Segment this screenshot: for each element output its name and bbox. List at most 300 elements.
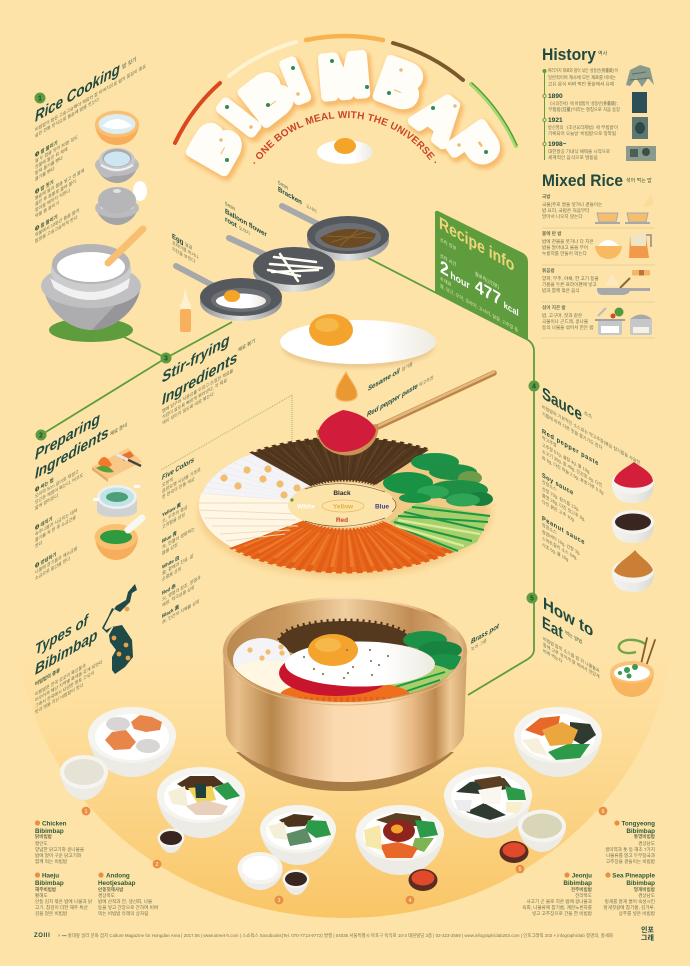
history text: 여러가지 재료와 밥이 섞인 '골동반(骨董飯)'이 <box>548 67 618 74</box>
recipe: red pepper paste: 고추장 57g, 설탕 4g, 물 10g, <box>542 441 590 476</box>
title: BIBIMBAP: I <box>209 92 268 143</box>
five colors heading: Five Colors <box>162 456 194 482</box>
connecting green flow line <box>41 258 534 695</box>
caption: haeju bibimbap: 해주비빔밥 <box>35 886 57 893</box>
mixed rice text: 곡물이나 곤드레, 콩나물 <box>542 318 588 325</box>
label: red pepper paste: Red pepper paste <box>367 383 418 419</box>
preparing text: 물기를 꼭 짠 후 소금간을 <box>35 513 76 544</box>
types text: 비빔밥의 종류 <box>35 666 60 688</box>
recipe: peanut sauce: 땅콩소스 <box>542 521 557 535</box>
rice steps text: 물기를 뺀다 <box>35 164 55 183</box>
caption: andong heotjesabap: Andong <box>106 872 130 880</box>
caption: tongyeong bibimbap: 통영비빔밥 <box>634 833 656 840</box>
colour label: yellow: Yellow <box>333 504 354 510</box>
pot interior <box>223 597 467 705</box>
pot contents <box>233 618 462 702</box>
preparing text: 소금으로 밑간을 한다 <box>35 554 71 582</box>
caption: jeonju bibimbap <box>522 872 593 917</box>
calories: 477 <box>475 275 501 310</box>
footer logo: korean mark: 인포 <box>641 925 654 934</box>
panel: stir-frying pans <box>172 180 389 332</box>
sprout heads <box>220 465 301 499</box>
pan: egg <box>176 266 282 321</box>
footer logo: korean mark: 그래 <box>641 933 654 942</box>
cooking time: 조리 시간 <box>440 252 457 269</box>
history text: 1921 <box>548 117 563 124</box>
five colors text: 봄을 상징 <box>162 541 178 557</box>
caption: haeju bibimbap: 고기, 참김이 더한 해주 특산 <box>35 904 89 911</box>
icons: gukbap bowls <box>595 195 654 224</box>
side bowl: soup 2 <box>518 810 566 852</box>
title: BIBIMBAP: P <box>440 117 513 184</box>
colour label: red: Red <box>336 517 348 524</box>
panel: stir-frying ingredients text <box>160 331 292 626</box>
fried egg large <box>280 314 436 368</box>
bowl 6: tongyeong bibimbap <box>514 707 602 777</box>
label: red pepper paste <box>367 373 434 419</box>
mixed rice text <box>542 193 602 331</box>
caption: tongyeong bibimbap: 생미역과 톳 등 해초 7가지 <box>605 846 655 853</box>
rice steps text: 쌀 두 컵을 씻어 30분 정도 <box>35 133 78 165</box>
subtitle on arc: · ONE BOWL MEAL WITH THE UNIVERSE · <box>253 111 436 164</box>
five colors text: 한 한국의 전통 색상 <box>162 475 195 501</box>
colour label: blue: Blue <box>375 504 389 510</box>
title: BIBIMBAP: B <box>180 117 255 184</box>
five colors text <box>162 456 201 626</box>
pot base <box>236 752 454 791</box>
bowl number badges: 5 <box>519 867 522 873</box>
panel: stir-frying ingredients text: 재료 볶기 <box>238 337 255 354</box>
five colors text: 순결을 상징 <box>162 565 181 583</box>
five colors text: 金, 결백과 진실, 삶 <box>162 552 194 577</box>
history text: 고유 음식 비벼 먹던 풍습에서 유래 <box>548 80 614 88</box>
label: bracken <box>278 180 317 215</box>
caption: andong heotjesabap <box>98 872 158 917</box>
bowl number badges <box>82 807 607 904</box>
caption: haeju bibimbap: 황해도 <box>35 892 48 899</box>
panel: mixed rice <box>542 171 655 338</box>
icon: stone pot with lid and steam <box>95 181 147 225</box>
central five-colour ingredient ring <box>199 449 493 577</box>
sauce intro: 비빔밥의 기본적인 소스로는 약고추장(볶음 찹기름을 사용한 <box>542 403 641 467</box>
recipe: red pepper paste: Red pepper paste <box>542 428 599 468</box>
caption: andong heotjesabap: Heotjesabap <box>98 880 136 887</box>
caption: tongyeong bibimbap: Tongyeong <box>622 820 655 828</box>
map of korea <box>102 584 137 674</box>
bean sprout segment <box>246 470 281 497</box>
step number 2 <box>36 430 46 440</box>
heading: stir-frying ingredients: Stir-frying <box>162 331 230 387</box>
five colors text: White 白 <box>162 554 179 571</box>
colour label: yellow <box>322 500 364 512</box>
brass pot <box>220 597 467 791</box>
mixed rice text: 기름을 두른 프라이팬에 넣고 <box>542 281 597 288</box>
label: bracken: Bracken <box>278 186 302 207</box>
preparing text <box>35 459 83 582</box>
caption: andong heotjesabap: 경상북도 <box>98 892 115 899</box>
caption: haeju bibimbap: Bibimbap <box>35 880 64 887</box>
recipe: peanut sauce: 땅콩버터 10g, 간장 3g, <box>542 528 580 557</box>
history text: 세계적인 음식으로 발돋움 <box>548 154 598 161</box>
spoon with red pepper paste <box>316 372 494 455</box>
preparing text: 한다 <box>35 538 43 550</box>
bracken in pot <box>278 618 410 654</box>
leader dot <box>290 498 294 502</box>
history text: 1890 <box>548 93 563 100</box>
label: balloon flower root: 도라지 <box>239 224 250 237</box>
preparing text: ❸ 양념하기 <box>35 550 57 570</box>
title: BIBIMBAP: B <box>372 50 432 123</box>
cucumber in pot <box>388 665 452 698</box>
title letter speckles <box>219 59 488 162</box>
title: BIBIMBAP: I <box>276 48 314 113</box>
recipe: soy sauce: 간장소스 <box>542 478 557 492</box>
recipe: peanut sauce: 식초 5g, 물 15g <box>542 541 569 563</box>
rice steps text: 약불 뜸 들이기 <box>35 199 59 220</box>
panel: how to eat <box>526 592 655 697</box>
caption: jeonju bibimbap: Jeonju <box>572 872 592 880</box>
types text: 그래서 전국에서 다양한 향토 고유의 <box>35 669 94 710</box>
history text: 일반적이며 제사에 모든 재료를 비비는 <box>548 74 616 81</box>
label: balloon flower root: Balloon flower <box>225 208 267 239</box>
icon: stone pot with water <box>95 148 139 183</box>
caption: jeonju bibimbap: 사고기 곤 물로 지은 밥에 콩나물과 <box>526 898 593 905</box>
label: balloon flower root: 5min <box>225 201 235 213</box>
pot body <box>223 651 467 782</box>
footer <box>34 925 654 942</box>
icon: pot with greens <box>93 485 140 517</box>
recipe: red pepper paste: 약고추장 <box>542 434 557 450</box>
five colors text: Black 黑 <box>162 604 179 620</box>
rice steps text: ❷ 밥 짓기 <box>35 178 54 196</box>
pot front rim fade <box>223 651 467 705</box>
title: BIBIMBAP: A <box>404 80 475 155</box>
title: BIBIMBAP: B <box>234 63 305 138</box>
caption: sea pineapple bibimbap: 멍게를 잘게 썰어 숙성시킨 <box>605 898 655 905</box>
caption: tongyeong bibimbap: 나물류를 얹고 두부탕국과 <box>606 852 656 859</box>
heading: stir-frying ingredients <box>162 331 237 409</box>
title: BIBIMBAP: B <box>178 114 253 181</box>
recipe: red pepper paste <box>542 428 604 497</box>
rice steps text: 잦아들 때까지 익힌다 <box>35 186 71 214</box>
main ingredients: 주재료 <box>440 275 452 289</box>
title: BIBIMBAP: I <box>279 51 317 116</box>
ring shadow <box>199 449 491 577</box>
recipe: soy sauce: Soy sauce <box>542 472 573 497</box>
bowl 2: andong heotjesabap <box>157 767 245 838</box>
history text: 1998~ <box>548 141 567 148</box>
title: BIBIMBAP: M <box>318 42 370 109</box>
caption: haeju bibimbap <box>35 872 93 917</box>
calories <box>475 270 519 320</box>
caption: andong heotjesabap: 안동헛제사밥 <box>98 886 124 893</box>
label: sesame oil <box>368 360 413 393</box>
step number 1 <box>34 92 46 104</box>
rice steps text: 약불에서 10분간 뜸을 들여 <box>35 206 79 239</box>
heading: mixed rice: Mixed Rice <box>542 171 623 190</box>
recipe: red pepper paste: 파 6g, 다진 마늘 2.5g, 후춧가루 0.3g <box>542 454 604 497</box>
title: BIBIMBAP: B <box>232 60 303 135</box>
icon: mixing arrow <box>619 640 645 653</box>
five colors text: 水, 인간의 지혜를 상징 <box>162 597 200 626</box>
caption: andong heotjesabap: 밥에 산적과 전, 생선회, 나물 <box>98 898 152 905</box>
history text: 대한항공 기내식 채택을 시작으로 <box>548 148 610 155</box>
label: sesame oil: 참기름 <box>402 360 413 374</box>
side dish: red sauce <box>408 869 438 891</box>
step number 2: 2 <box>39 432 43 440</box>
recipe: peanut sauce <box>542 515 585 573</box>
history text: '부뷤밥(汨董)'이라는 명칭으로 처음 등장 <box>548 106 621 113</box>
colour label: white: White <box>297 504 315 510</box>
icon: oil bottle <box>180 288 191 332</box>
intro text: 살린 전통 방식으로 돌솥에 밥을 짓는다 <box>35 95 100 140</box>
icon: small egg under title <box>317 138 373 164</box>
step number 4: 4 <box>532 384 536 390</box>
panel: recipe info: 조리 정보 <box>440 236 457 253</box>
panel: recipe info <box>435 211 528 340</box>
white root sticks <box>199 503 298 541</box>
label: egg: Egg <box>172 233 183 247</box>
carrot segment <box>267 534 418 551</box>
heading korean: 밥 짓기 <box>122 55 136 71</box>
bowl 4: jeonju bibimbap <box>355 805 444 875</box>
footer text: × ▪▪▪ 홍대앞 일러 문화 잡지 Culture Magazine for Hongdae Area | 2017.06 | www.street-h.com | 스쇼픽스 Sosobooks(Tel. 070-7713-9772) 발행 | 04035 서울특별시 마포구 독막로 10-3 태원빌딩 3층 | 02-323-2569 | www.infographiclab203.com | 인포그래픽 203 × infographiclab 정명의, 홍세화 <box>58 932 613 939</box>
step number 3 <box>160 352 172 364</box>
label: brass pot: Brass pot <box>471 623 499 646</box>
heading: how to eat: Eat <box>542 613 563 643</box>
caption: chicken bibimbap: 함께 먹는 비빔밥 <box>35 858 68 865</box>
side dish: red sauce 2 <box>500 841 528 863</box>
caption: haeju bibimbap: 안동 김치 볶은 밥에 나물과 닭 <box>35 898 93 905</box>
label: balloon flower root: root <box>225 216 237 230</box>
caption: chicken bibimbap: Bibimbap <box>35 828 64 835</box>
icons: rice bowl and jug <box>595 234 651 259</box>
caption: jeonju bibimbap: 전라북도 <box>575 892 592 899</box>
mixed rice text: 밥에 찬물을 붓거나 다 지은 <box>542 238 594 245</box>
caption: andong heotjesabap: 먹는 비빔밥 유래의 상차림 <box>98 910 148 917</box>
rice steps text: 밭쳐 물기를 뺀다 <box>35 154 63 177</box>
caption: sea pineapple bibimbap: Bibimbap <box>626 880 655 887</box>
heading: history: History <box>542 45 596 64</box>
recipe: soy sauce: 간장 70g, 참기름 13g, <box>542 485 579 513</box>
white root segment <box>245 497 267 534</box>
sesame oil drop <box>336 372 357 401</box>
five colors text: 火, 생명과 창조, 정열과 <box>162 573 201 603</box>
recipe: red pepper paste: 소고기 36g, 참 40g, 진간장 4g, 다진 <box>542 447 602 489</box>
heading: sauce: Sauce <box>542 383 582 425</box>
bowl number badges: 2 <box>156 862 159 868</box>
mixed rice text: 밥을 말아내고 물을 부어 <box>542 244 588 251</box>
caption: tongyeong bibimbap: 경상남도 <box>638 840 655 846</box>
panel: rice cooking <box>34 55 147 342</box>
heading: rice cooking: Rice Cooking <box>35 60 120 126</box>
caption: tongyeong bibimbap: Bibimbap <box>626 828 655 835</box>
heading: types of bibimbap: Types of <box>35 610 90 659</box>
bowl 3: haeju bibimbap <box>260 805 336 865</box>
types text <box>35 642 103 716</box>
side bowl: soup <box>60 755 108 800</box>
title: BIBIMBAP: A <box>406 83 477 158</box>
preparing text: 나물에 참기름과 깨소금을 <box>35 545 77 576</box>
rice steps text <box>35 127 84 245</box>
caption: chicken bibimbap: 양념한 닭고기와 콩나물을 <box>35 846 84 853</box>
white root in pot <box>234 661 294 697</box>
caption: sea pineapple bibimbap: 멍게비빔밥 <box>634 886 656 893</box>
title: BIBIMBAP: P <box>438 114 511 181</box>
panel: history <box>542 45 656 161</box>
intro text: 비빔밥의 밥은 고슬고슬해야 재료와 잘 비벼지므로 쌀의 품질이 중요 <box>35 62 146 134</box>
label: bracken: 5min <box>278 180 288 192</box>
types text: 어우러져 해당 지역별 특색을 갖게 되었다 <box>35 658 103 704</box>
caption: chicken bibimbap: Chicken <box>42 820 67 828</box>
recipe: soy sauce: 물엿 28g, 다진 청고추 8g, <box>542 491 585 523</box>
heading: recipe info: Recipe info <box>439 213 514 276</box>
mixed rice text: 누룽지를 만들어 먹는다 <box>542 250 588 257</box>
mixed rice text: 밥과 함께 볶은 음식 <box>542 287 580 294</box>
mixed rice text: 볶음밥 <box>542 267 555 274</box>
caption: sea pineapple bibimbap: Sea Pineapple <box>612 872 655 880</box>
heading: preparing ingredients: Ingredients <box>35 423 109 483</box>
caption: sea pineapple bibimbap <box>603 872 656 917</box>
history picture: table <box>626 146 656 161</box>
mixed rice text: 말아서 나오지 않는다 <box>542 213 583 220</box>
background: lower bowl shaded arc <box>17 322 673 918</box>
side dish: soy sauce <box>158 828 184 853</box>
five colors text: 음양오행 사상을 기초로 <box>162 466 201 495</box>
pan: bracken <box>282 206 389 261</box>
icon: bowl of water <box>95 110 139 145</box>
icon: cutting board <box>92 448 142 482</box>
mixed rice text: 등의 나물을 섞어서 만든 밥 <box>542 324 594 331</box>
icon: bowl being mixed <box>610 661 654 697</box>
panel: history: 역사 <box>598 50 608 57</box>
preparing text: 오이와 5cm 길이로 채썰고 <box>35 468 79 500</box>
mixed rice text: 밥 요리, 국밥은 처음부터 <box>542 207 589 214</box>
caption: andong heotjesabap: 등을 넣고 간장으로 간하여 비벼 <box>98 904 158 911</box>
title: BIBIMBAP: M <box>320 45 372 112</box>
icons: frying pan <box>597 270 650 295</box>
cucumber segment <box>390 503 490 553</box>
heading: types of bibimbap: Bibimbap <box>35 626 97 679</box>
stir-frying text: 팬에 달구어 식용유를 두르고 손질한 재료를 <box>162 367 233 415</box>
egg on top <box>285 634 435 686</box>
panel: how to eat: 먹는 방법 <box>565 629 582 646</box>
recipe: peanut sauce: 스위트칠리 소스 54g, <box>542 534 577 562</box>
footer logo: street: ZOIII <box>34 933 50 939</box>
caption: chicken bibimbap: 닭비빔밥 <box>35 833 53 840</box>
five colors text: Blue 靑 <box>162 529 177 545</box>
red paste under egg <box>279 650 393 696</box>
recipe: peanut sauce: Peanut sauce <box>542 515 585 547</box>
panel: sauce <box>528 380 654 592</box>
icon: mortar with greens <box>94 518 142 560</box>
label: sesame oil: Sesame oil <box>368 367 401 393</box>
bowl number badges: 1 <box>85 809 88 815</box>
caption: haeju bibimbap: 김을 얹은 비빔밥 <box>35 910 68 917</box>
greens in pot <box>403 631 467 670</box>
rice steps text: ❸ 뜸 들이기 <box>35 213 58 233</box>
five colors text: Red 赤 <box>162 582 176 597</box>
mixed rice text: 양파, 부추, 야채, 한 고기 등을 <box>542 275 599 282</box>
caption: jeonju bibimbap: Bibimbap <box>563 880 592 887</box>
stir-frying text: 색이 섞이지 않도록 따로 볶는다 <box>162 390 215 427</box>
bracken segment <box>281 459 402 470</box>
caption: sea pineapple bibimbap: 상추를 넣은 비빔밥 <box>619 910 656 917</box>
heading: preparing ingredients: Preparing <box>35 409 100 464</box>
panel: preparing ingredients: 재료 준비 <box>110 421 127 438</box>
bowl number badges: 6 <box>602 809 605 815</box>
caption: chicken bibimbap <box>35 820 84 865</box>
sauce cup: red pepper paste <box>612 462 654 503</box>
mixed rice text: 밥, 고구마, 잣과 같은 <box>542 312 582 319</box>
sauce cup: peanut sauce <box>612 550 654 592</box>
icon: green burner base <box>49 318 133 342</box>
icons: steam pots <box>595 308 652 335</box>
title: BIBIMBAP <box>178 42 513 184</box>
how to eat text: 비빔밥 밥의 소스를 밥 위 나물들과 <box>543 635 600 675</box>
how to eat text: 비벼 먹는다 <box>543 647 563 666</box>
bowl 5: sea pineapple bibimbap <box>444 767 532 838</box>
heading: how to eat: How to <box>543 594 593 641</box>
bowl number badges: 3 <box>278 898 281 904</box>
history text: 방신영의 《조선요리제법》에 '부빔밥'이 <box>548 124 618 131</box>
caption: jeonju bibimbap: 전주비빔밥 <box>571 886 593 893</box>
carrot in pot <box>280 684 410 702</box>
rice steps text: 밥알을 고슬고슬하게 한다 <box>35 213 78 245</box>
panel: types of bibimbap <box>35 584 137 716</box>
colour label: black: Black <box>333 490 351 497</box>
preparing text: ❶ 써는 법 <box>35 476 54 494</box>
five colors leader line <box>161 395 292 500</box>
title: BIBIMBAP: I <box>212 95 271 146</box>
history picture: magazine <box>632 117 648 139</box>
panel: sauce: 소스 <box>584 410 592 421</box>
heading: stir-frying ingredients: Ingredients <box>162 348 237 409</box>
caption: tongyeong bibimbap: 고추장을 곁들이는 비빔밥 <box>606 858 656 865</box>
history picture: engraving <box>626 65 654 87</box>
mixed rice text: 국물(주로 쌀을 넣거나 곁들이는 <box>542 201 602 208</box>
five colors text: 土, 우주의 중심 <box>162 503 188 525</box>
cooking time: hour <box>450 270 470 292</box>
mixed rice text: 섞어 지은 밥 <box>542 304 566 311</box>
types text: 맛과 멋을 지닌 비빔밥이 있다 <box>35 681 84 716</box>
dividers <box>542 228 655 338</box>
rice steps text: 찬물에 불린 뒤 체에 <box>35 145 67 171</box>
icon: large stone pot with rice <box>41 229 143 330</box>
preparing text: 당근은 채썰어 볶는다, 버섯도 <box>35 471 83 506</box>
caption: sea pineapple bibimbap: 경상남도 <box>638 892 655 898</box>
pan: balloon flower root <box>229 238 335 292</box>
rice steps text: 끓인 후 중불로 줄여 물이 <box>35 177 76 208</box>
side bowl: rice <box>238 852 283 890</box>
label: red pepper paste: 약고추장 <box>419 373 434 389</box>
mixed rice text: 물에 만 밥 <box>542 230 562 237</box>
footer logo: korean mark <box>641 925 654 942</box>
label: egg <box>172 233 199 268</box>
five colors text: 오방색 <box>162 476 173 489</box>
preparing text: ❷ 데치기 <box>35 515 53 532</box>
recipe: soy sauce: 다진 붉은 고추 10g <box>542 498 574 524</box>
title arc segments <box>175 36 517 146</box>
label: egg: 프라이를 하거나 <box>172 239 199 262</box>
cooking time <box>440 252 470 293</box>
step number 1: 1 <box>38 96 42 102</box>
caption: chicken bibimbap: 밥에 얹어 구운 닭고기와 <box>35 852 82 859</box>
main ingredients: 쌀, 당근, 오이, 도라지, 고사리, 달걀, 고추장 등 <box>440 282 519 334</box>
rice steps text: ❶ 쌀 불리기 <box>35 139 58 159</box>
history text <box>548 67 621 161</box>
greens segment <box>383 453 493 506</box>
